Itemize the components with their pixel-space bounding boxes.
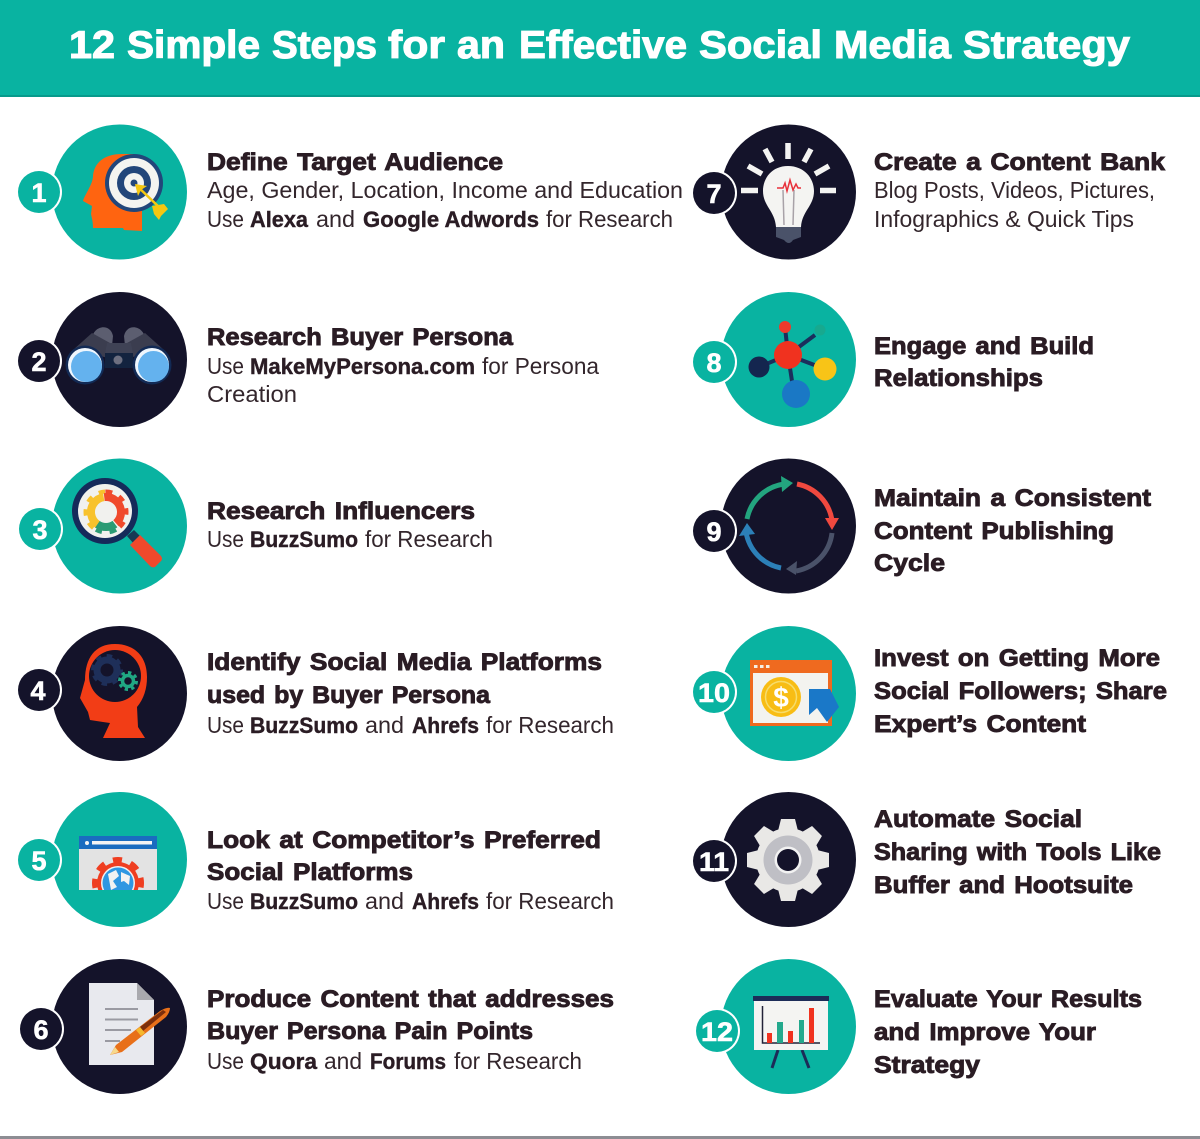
badge 10 xyxy=(691,669,737,715)
step 1 xyxy=(16,124,683,260)
text: step 10: Invest on Getting More xyxy=(874,645,1160,672)
text: step 8 xyxy=(874,333,1094,392)
step 2 xyxy=(16,292,599,427)
title xyxy=(69,24,1130,67)
text: step 7: Infographics & Quick Tips xyxy=(874,206,1134,232)
text: step 2: for Persona xyxy=(482,353,599,379)
title: for xyxy=(388,24,445,67)
text: step 9 xyxy=(874,485,1151,577)
step 3 xyxy=(17,458,493,594)
badge 12 xyxy=(694,1008,740,1054)
text: step 5 xyxy=(207,827,614,914)
text: step 11: Automate Social xyxy=(874,806,1082,833)
text: step 1: Define Target Audience xyxy=(207,149,503,176)
icon: browser with coin and cursor: $ xyxy=(773,682,789,713)
badge 1: 1 xyxy=(31,178,47,208)
text: step 12 xyxy=(874,986,1142,1079)
badge 4: 4 xyxy=(30,676,46,706)
text: step 6: Forums xyxy=(370,1049,446,1074)
text: step 7: Blog Posts, Videos, Pictures, xyxy=(874,177,1155,203)
text: step 3: Research Influencers xyxy=(207,498,475,525)
text: step 1: Use xyxy=(207,206,244,232)
text: step 12: Evaluate Your Results xyxy=(874,986,1142,1013)
icon: light bulb xyxy=(741,143,836,243)
text: step 10: Social Followers; Share xyxy=(874,678,1167,705)
text: step 6: for Research xyxy=(454,1048,582,1074)
text: step 2: Creation xyxy=(207,381,297,407)
step 9 xyxy=(691,458,1151,594)
icon: head with gears xyxy=(80,644,147,738)
badge 4 xyxy=(16,667,62,713)
icon: head with target xyxy=(83,154,168,231)
text: step 4: Ahrefs xyxy=(412,713,479,738)
text: step 9: Maintain a Consistent xyxy=(874,485,1151,512)
text: step 1 xyxy=(207,149,683,232)
text: step 6: Produce Content that addresses xyxy=(207,986,614,1013)
text: step 4 xyxy=(207,649,614,738)
text: step 1: and xyxy=(316,206,355,232)
text: step 11 xyxy=(874,806,1161,899)
text: step 4: Identify Social Media Platforms xyxy=(207,649,602,676)
text: step 10: Expert’s Content xyxy=(874,711,1086,738)
badge 11: 11 xyxy=(699,847,729,877)
title: Media xyxy=(834,24,951,67)
icon: gear xyxy=(747,819,829,901)
text: step 2: Use xyxy=(207,353,244,379)
badge 5: 5 xyxy=(31,846,47,876)
badge 9 xyxy=(691,508,737,554)
icon: binoculars xyxy=(66,327,172,384)
title: Strategy xyxy=(963,24,1130,67)
badge 8: 8 xyxy=(706,348,722,378)
text: step 2 xyxy=(207,324,599,407)
badge 2 xyxy=(16,338,62,384)
text: step 7 xyxy=(874,149,1165,232)
text: step 3: BuzzSumo xyxy=(250,527,358,552)
text: step 9: Cycle xyxy=(874,550,945,577)
step 6 xyxy=(18,959,614,1094)
icon: browser window with globe gear xyxy=(79,836,157,890)
text: step 6: Buyer Persona Pain Points xyxy=(207,1018,533,1045)
icon: document with pen xyxy=(89,983,170,1065)
badge 3: 3 xyxy=(32,515,48,545)
text: step 9: Content Publishing xyxy=(874,518,1114,545)
text: step 5: Use xyxy=(207,888,244,914)
title: 12 xyxy=(69,24,115,67)
text: step 4: Use xyxy=(207,712,244,738)
step 7 xyxy=(691,124,1165,260)
title: Social xyxy=(699,24,822,67)
icon: cycle arrows xyxy=(739,476,839,575)
text: step 5: Social Platforms xyxy=(207,859,413,886)
badge 3 xyxy=(17,506,63,552)
text: step 4: BuzzSumo xyxy=(250,713,358,738)
header banner xyxy=(0,0,1200,97)
title: Simple xyxy=(127,24,260,67)
text: step 3: Use xyxy=(207,526,244,552)
badge 6: 6 xyxy=(33,1015,49,1045)
badge 11 xyxy=(691,838,737,884)
text: step 2: Research Buyer Persona xyxy=(207,324,513,351)
text: step 1: Alexa xyxy=(250,207,309,232)
icon: browser with coin and cursor xyxy=(750,660,839,726)
text: step 4: and xyxy=(365,712,404,738)
text: step 1: for Research xyxy=(546,206,673,232)
text: step 5: and xyxy=(365,888,404,914)
text: step 6: Quora xyxy=(250,1049,318,1074)
text: step 7: Create a Content Bank xyxy=(874,149,1165,176)
text: step 4: used by Buyer Persona xyxy=(207,682,490,709)
badge 2: 2 xyxy=(31,347,47,377)
text: step 8: Engage and Build xyxy=(874,333,1094,360)
text: step 3 xyxy=(207,498,493,552)
text: step 6: and xyxy=(324,1048,362,1074)
text: step 4: for Research xyxy=(486,712,614,738)
text: step 2: MakeMyPersona.com xyxy=(250,354,475,379)
title: Effective xyxy=(519,24,687,67)
text: step 10 xyxy=(874,645,1167,738)
icon: network nodes xyxy=(748,321,836,408)
step 4 xyxy=(16,626,614,761)
text: step 1: Age, Gender, Location, Income and Education xyxy=(207,177,683,203)
text: step 12: and Improve Your xyxy=(874,1019,1096,1046)
text: step 5: BuzzSumo xyxy=(250,889,358,914)
title: Steps xyxy=(272,24,377,67)
badge 1 xyxy=(16,169,62,215)
badge 5 xyxy=(16,837,62,883)
step 8 xyxy=(691,292,1094,427)
text: step 6 xyxy=(207,986,614,1074)
text: step 11: Buffer and Hootsuite xyxy=(874,872,1133,899)
badge 7 xyxy=(691,170,737,216)
step 10 xyxy=(691,626,1167,761)
title: an xyxy=(457,24,505,67)
badge 10: 10 xyxy=(698,678,730,708)
badge 9: 9 xyxy=(706,517,722,547)
badge 6 xyxy=(18,1006,64,1052)
badge 7: 7 xyxy=(706,179,722,209)
step 11 xyxy=(691,792,1161,927)
step 12 xyxy=(694,959,1142,1094)
badge 12: 12 xyxy=(701,1017,733,1047)
badge 8 xyxy=(691,339,737,385)
text: step 1: Google Adwords xyxy=(363,207,539,232)
icon: presentation board with bar chart xyxy=(753,996,829,1068)
text: step 5: Look at Competitor’s Preferred xyxy=(207,827,601,854)
step 5 xyxy=(16,792,614,927)
text: step 5: for Research xyxy=(486,888,614,914)
text: step 3: for Research xyxy=(365,526,493,552)
text: step 11: Sharing with Tools Like xyxy=(874,839,1161,866)
text: step 6: Use xyxy=(207,1048,244,1074)
text: step 8: Relationships xyxy=(874,365,1043,392)
text: step 12: Strategy xyxy=(874,1052,980,1079)
text: step 5: Ahrefs xyxy=(412,889,479,914)
icon: magnifier with gear xyxy=(72,478,162,567)
